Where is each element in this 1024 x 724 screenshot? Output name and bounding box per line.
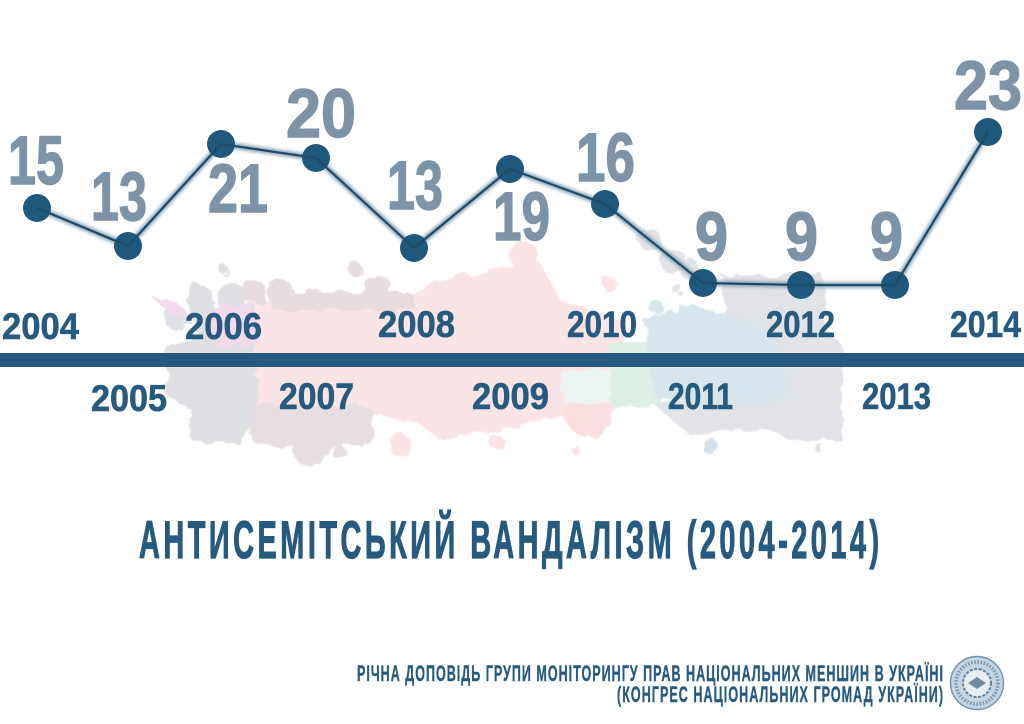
background: paint splatter — [150, 229, 842, 466]
year labels: 2006 — [185, 306, 262, 347]
data values: 15 — [8, 122, 64, 199]
line halo — [37, 132, 988, 285]
data values: 9 — [695, 198, 728, 275]
splatter: green — [610, 342, 664, 406]
splatter: right grey — [639, 229, 842, 440]
footer source text — [357, 661, 943, 707]
splatter: upper brown-grey — [242, 263, 414, 310]
year labels: 2008 — [378, 304, 455, 345]
year labels — [2, 304, 1021, 419]
year labels: 2004 — [2, 306, 79, 347]
data values: 19 — [493, 178, 550, 255]
line core — [37, 132, 988, 285]
data values: 16 — [576, 119, 635, 196]
year labels: 2012 — [766, 304, 835, 345]
data points — [23, 118, 1002, 299]
year labels: 2013 — [862, 376, 931, 417]
data values: 21 — [208, 150, 268, 227]
data values: 13 — [91, 158, 147, 235]
data values: 9 — [870, 198, 903, 275]
data values: 9 — [785, 198, 818, 275]
data values — [8, 47, 1022, 275]
year labels: 2009 — [472, 376, 549, 417]
splatter: pink centre — [250, 242, 622, 456]
footer source text: РІЧНА ДОПОВІДЬ ГРУПИ МОНІТОРИНГУ ПРАВ НАЦІОНАЛЬНИХ МЕНШИН В УКРАЇНІ — [357, 661, 943, 686]
footer source text: (КОНГРЕС НАЦІОНАЛЬНИХ ГРОМАД УКРАЇНИ) — [617, 682, 943, 707]
data values: 20 — [286, 75, 356, 152]
icon: congress logo seal — [950, 656, 1004, 710]
splatter: lower brown-grey — [250, 405, 374, 466]
splatter: violet edge — [150, 296, 256, 346]
year labels: 2010 — [567, 304, 637, 345]
year labels: 2007 — [279, 376, 354, 417]
timeline bar — [0, 353, 1024, 367]
year labels: 2011 — [668, 376, 733, 417]
title: АНТИСЕМІТСЬКИЙ ВАНДАЛІЗМ (2004-2014) — [139, 510, 879, 570]
splatter: left grey — [164, 265, 258, 445]
splatter: droplets — [573, 437, 823, 456]
year labels: 2005 — [91, 378, 167, 419]
data values: 13 — [387, 147, 443, 224]
splatter: blue — [645, 300, 790, 405]
splatter: pale mint — [562, 370, 614, 404]
line chart — [23, 118, 1002, 299]
